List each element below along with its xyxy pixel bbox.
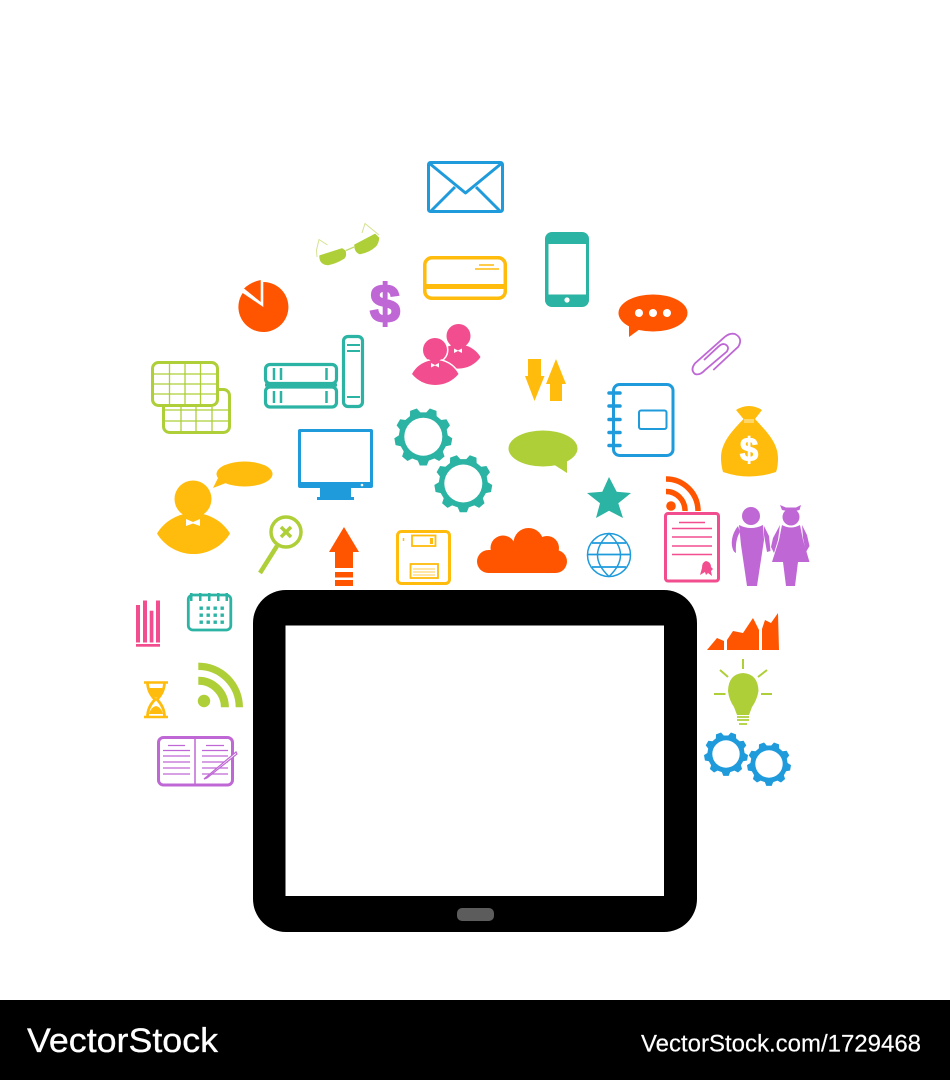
icon: spiral notebook: [609, 384, 673, 456]
icon: envelope: [428, 162, 502, 212]
footer logo: VectorStock: [27, 1022, 219, 1060]
icon: credit card: [424, 258, 506, 298]
icon: two users: [412, 324, 480, 385]
icon: star: [587, 477, 631, 518]
icon: money bag: [721, 406, 778, 476]
icon: magnifier: [260, 517, 301, 573]
icon: green speech bubble: [508, 430, 578, 473]
icon: orange upload arrow: [329, 527, 359, 586]
icon: blue gears: [704, 733, 791, 786]
icon: books: [265, 336, 362, 407]
icon: up and down arrows: [525, 359, 566, 401]
icon: certificate: [666, 514, 718, 581]
icon: hourglass: [144, 682, 168, 717]
icon: floppy disk: [398, 532, 450, 584]
icon: pink bar chart: [136, 600, 160, 647]
icon: teal gears: [394, 408, 492, 512]
icon: dollar sign: $: [370, 274, 400, 334]
icon: globe: [588, 534, 630, 576]
icon: calendar: [188, 593, 231, 630]
tablet home button: [457, 908, 494, 921]
icon: data table cards: [152, 362, 230, 433]
icon: glasses: [316, 224, 379, 264]
footer image url: VectorStock.com/1729468: [641, 1030, 921, 1058]
icon: blue monitor: [298, 429, 373, 500]
icon: money bag: $: [740, 431, 758, 468]
icon: pie chart: [238, 280, 288, 332]
icon: man and woman: [732, 505, 810, 586]
icon: green rss signal: [198, 666, 239, 707]
tablet device: [253, 590, 697, 932]
icon: cloud: [477, 528, 567, 573]
icon: orange rss signal: [666, 479, 698, 511]
tablet screen: [286, 626, 664, 896]
icon: yellow person with speech bubble: [157, 462, 272, 554]
icon: open book with pen: [158, 738, 237, 785]
icon: orange area chart: [707, 613, 779, 650]
icon: smartphone: [545, 232, 589, 307]
icon: light bulb: [714, 659, 772, 724]
footer bar: [0, 1000, 950, 1080]
icon: orange chat bubble: [618, 294, 688, 337]
icon: paperclip: [692, 334, 740, 374]
